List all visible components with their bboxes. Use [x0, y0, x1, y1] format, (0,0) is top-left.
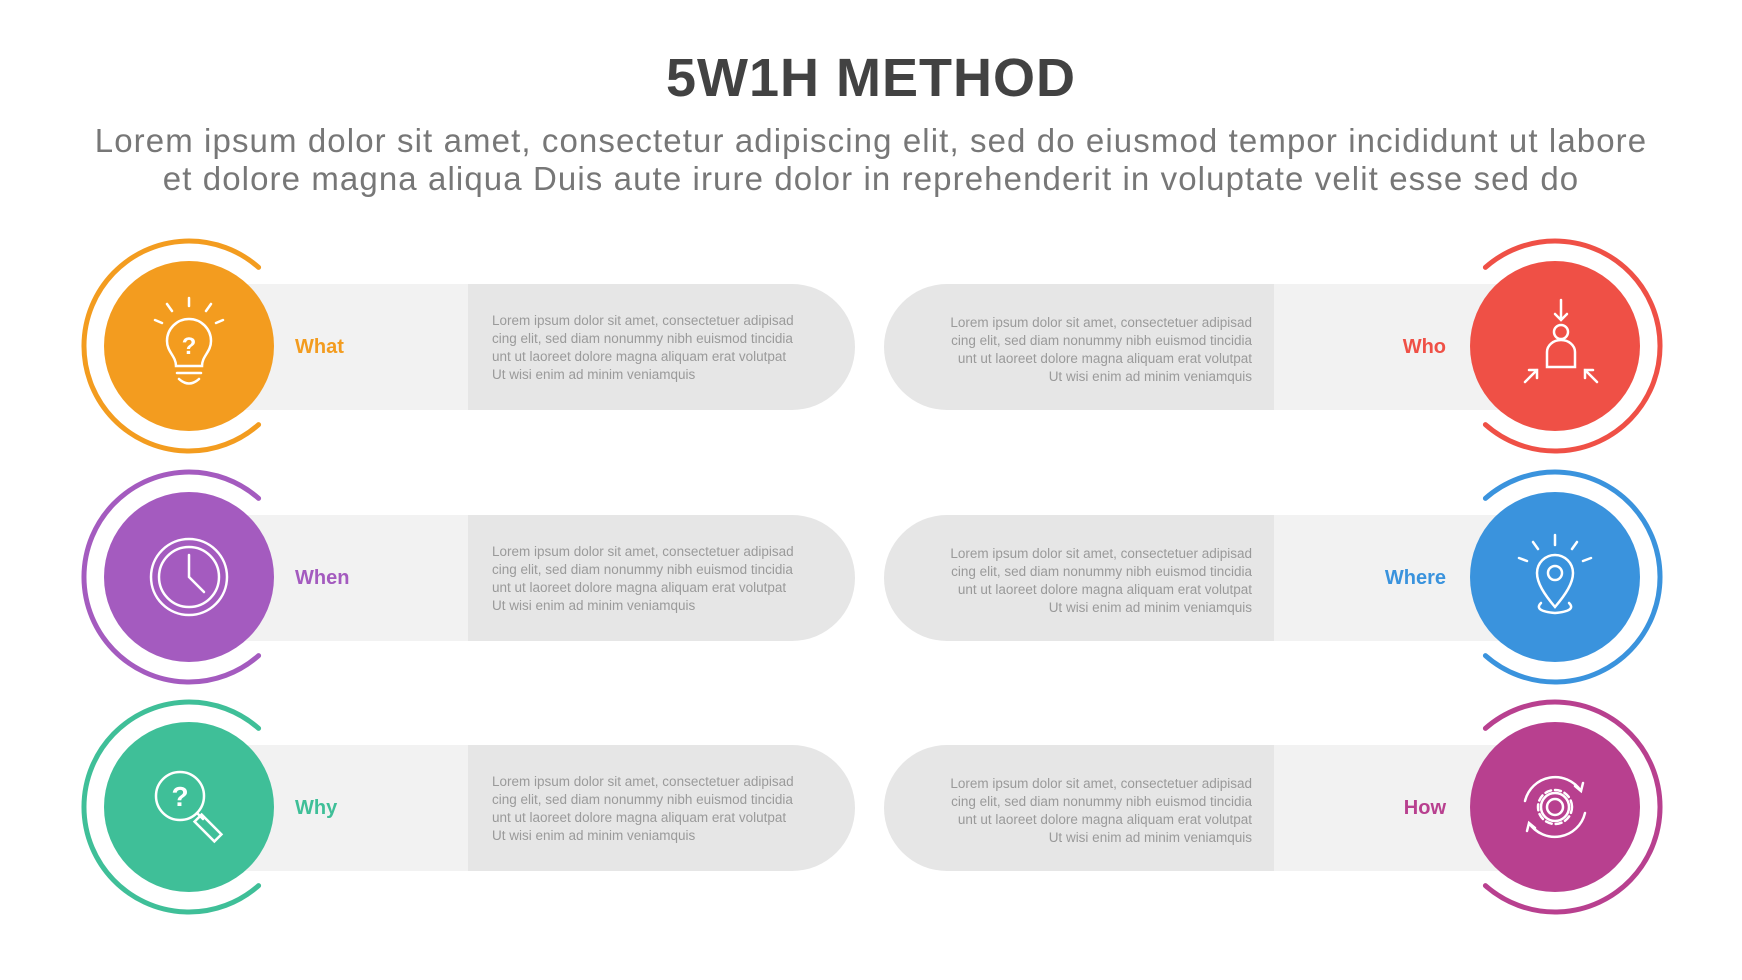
item: Who: Who: [1403, 336, 1446, 358]
item: Who: Lorem ipsum dolor sit amet, consectetuer adipisad: [950, 315, 1252, 330]
subtitle: [95, 122, 1647, 197]
item: How: Ut wisi enim ad minim veniamquis: [1049, 830, 1252, 845]
item: How: [884, 702, 1660, 912]
item: Why: Why: [295, 797, 338, 819]
item: Where: cing elit, sed diam nonummy nibh euismod tincidia: [951, 564, 1252, 579]
subtitle: et dolore magna aliqua Duis aute irure dolor in reprehenderit in voluptate velit esse sed do: [163, 160, 1579, 197]
icon: light bulb: [155, 298, 223, 384]
item: Who: [884, 241, 1660, 451]
item: Who: cing elit, sed diam nonummy nibh euismod tincidia: [951, 333, 1252, 348]
item: How: cing elit, sed diam nonummy nibh euismod tincidia: [951, 794, 1252, 809]
item: What: Lorem ipsum dolor sit amet, consectetuer adipisad: [492, 313, 794, 328]
item: When: Ut wisi enim ad minim veniamquis: [492, 598, 696, 613]
item: Why: unt ut laoreet dolore magna aliquam erat volutpat: [492, 810, 786, 825]
item: Where: Lorem ipsum dolor sit amet, consectetuer adipisad: [950, 546, 1252, 561]
icon: gear with cycle arrows: [1525, 777, 1585, 837]
icon: magnifier question: ?: [171, 781, 189, 812]
title: 5W1H METHOD: [666, 48, 1076, 108]
item: When: When: [295, 567, 349, 589]
item: Where: unt ut laoreet dolore magna aliquam erat volutpat: [958, 582, 1252, 597]
item: How: unt ut laoreet dolore magna aliquam erat volutpat: [958, 812, 1252, 827]
item: What: What: [295, 336, 344, 358]
item: What: Ut wisi enim ad minim veniamquis: [492, 367, 696, 382]
item: When: [84, 472, 855, 682]
item: When: cing elit, sed diam nonummy nibh euismod tincidia: [492, 562, 793, 577]
item: What: cing elit, sed diam nonummy nibh euismod tincidia: [492, 331, 793, 346]
item: Who: unt ut laoreet dolore magna aliquam erat volutpat: [958, 351, 1252, 366]
item: When: unt ut laoreet dolore magna aliquam erat volutpat: [492, 580, 786, 595]
item: What: unt ut laoreet dolore magna aliquam erat volutpat: [492, 349, 786, 364]
item: Who: Ut wisi enim ad minim veniamquis: [1049, 369, 1252, 384]
item: How: Lorem ipsum dolor sit amet, consectetuer adipisad: [950, 776, 1252, 791]
icon: light bulb: ?: [182, 333, 196, 360]
icon: person with arrows: [1525, 300, 1597, 382]
item: What: [84, 241, 855, 451]
item: Why: cing elit, sed diam nonummy nibh euismod tincidia: [492, 792, 793, 807]
item: When: Lorem ipsum dolor sit amet, consectetuer adipisad: [492, 544, 794, 559]
item: How: How: [1404, 797, 1446, 819]
item: Why: [84, 702, 855, 912]
item: Where: Ut wisi enim ad minim veniamquis: [1049, 600, 1252, 615]
item: Where: Where: [1385, 567, 1446, 589]
subtitle: Lorem ipsum dolor sit amet, consectetur adipiscing elit, sed do eiusmod tempor incididunt ut labore: [95, 122, 1647, 159]
item: Where: [884, 472, 1660, 682]
icon: clock: [151, 539, 227, 615]
item: Why: Ut wisi enim ad minim veniamquis: [492, 828, 696, 843]
icon: magnifier question: [156, 772, 221, 841]
item: Why: Lorem ipsum dolor sit amet, consectetuer adipisad: [492, 774, 794, 789]
icon: location pin: [1519, 535, 1591, 613]
